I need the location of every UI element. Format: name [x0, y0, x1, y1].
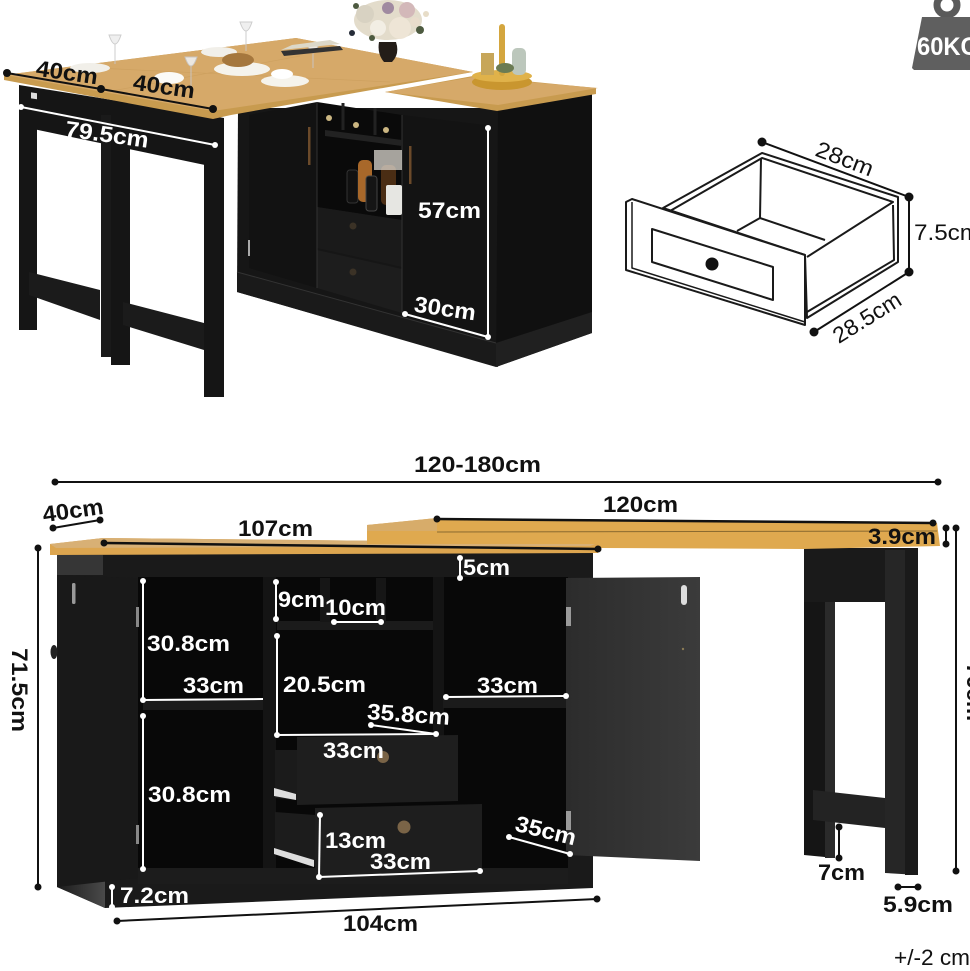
dimension: 13cm lower drawer height: 13cm: [325, 828, 386, 853]
dimension: 71.5cm height: [7, 544, 42, 890]
cabinet countertop: [50, 538, 598, 555]
cabinet carcass: [57, 553, 593, 908]
table apron and legs: [19, 85, 224, 397]
dimension: 28.5cm drawer depth: 28.5cm: [828, 287, 906, 348]
tolerance note: +/-2 cm: [894, 945, 970, 970]
drawer front panel: [626, 199, 805, 325]
icon: gold tray with bottles: [472, 24, 532, 90]
dimension: 35.8cm center depth: 35.8cm: [366, 699, 451, 730]
shelves and dividers: [138, 577, 568, 884]
drawer box: [663, 153, 898, 318]
dimension: 5.9cm leg width: 5.9cm: [883, 892, 953, 917]
dimension: 57cm cabinet height: [418, 125, 491, 340]
dimension: 40cm left tabletop depth: 40cm: [35, 56, 99, 89]
upper drawer open: [274, 735, 458, 805]
dimension: 9cm cubby height: 9cm: [278, 587, 325, 612]
dimension: 28cm drawer width: 28cm: [812, 137, 877, 181]
dimension: 33cm upper drawer width: 33cm: [323, 738, 384, 763]
dimension: 35cm cabinet depth: 35cm: [513, 811, 579, 850]
icon: 60KG load weight: [912, 0, 970, 70]
dimension: 79.5cm leg span: 79.5cm: [64, 116, 150, 153]
panel: drawer line drawing: [626, 137, 970, 348]
dimension: 28.5cm drawer depth: [810, 272, 909, 348]
right door open: [566, 577, 700, 861]
cabinet countertop: [385, 76, 598, 111]
bottles and bowls in cabinet niche: [326, 115, 402, 215]
dimension: 20.5cm center opening height: 20.5cm: [283, 672, 366, 697]
left door details: [50, 583, 139, 844]
dimension: 5.9cm leg width: [883, 884, 953, 917]
dimension: 76cm leg height: [952, 524, 970, 874]
dimension: 10cm cubby width: 10cm: [325, 595, 386, 620]
panel: assembled island perspective view: [3, 0, 598, 397]
dimension: 120cm tabletop: [434, 492, 936, 526]
dimension: 79.5cm leg span: [18, 104, 218, 153]
dimension: 104cm base width: 104cm: [343, 911, 418, 936]
dimension: 7cm leg clearance: [818, 824, 865, 885]
dimension: 30.8cm lower shelf height: [140, 713, 231, 872]
dimension: 33cm lower drawer width: 33cm: [370, 849, 431, 874]
lower drawer open: [274, 804, 482, 877]
dimension: 3.9cm top thickness: 3.9cm: [868, 524, 936, 549]
dimension: 40cm right tabletop depth: [101, 70, 217, 113]
dimension: 7.2cm plinth height: 7.2cm: [120, 883, 189, 908]
dimension: 33cm left shelf width: 33cm: [183, 673, 244, 698]
dimension: 30cm cabinet depth: 30cm: [413, 292, 477, 325]
dimension: 107cm countertop: 107cm: [238, 516, 313, 541]
dimension: 5cm top rail: 5cm: [463, 555, 510, 580]
dimension: 28cm drawer width: [758, 137, 914, 202]
dimension: 71.5cm height: 71.5cm: [7, 648, 32, 732]
dimension: 33cm right shelf width: 33cm: [477, 673, 538, 698]
dimension: 120-180cm overall width: [52, 452, 942, 486]
dimension: 40cm right tabletop depth: 40cm: [132, 70, 196, 103]
panel: open cabinet front view: [7, 452, 970, 936]
dimension: 33cm left shelf width: [143, 673, 263, 700]
door handles and drawer knobs: [248, 127, 412, 276]
icon: flower vase: [349, 0, 429, 62]
dimension: 120-180cm overall width: 120-180cm: [414, 452, 541, 477]
dimension: 30.8cm upper shelf height: 30.8cm: [147, 631, 230, 656]
dimension: 9cm cubby height: [273, 579, 325, 622]
dimension: 20.5cm center opening height: [274, 633, 366, 738]
extended tabletop: [367, 518, 940, 549]
dimension: 33cm right shelf width: [443, 673, 569, 700]
dimension: 40cm left tabletop depth: [3, 56, 105, 93]
dimension: 7cm leg clearance: 7cm: [818, 860, 865, 885]
table leg frame: [804, 548, 918, 875]
dimension: 40cm depth: 40cm: [41, 494, 105, 527]
dimension: 7.5cm drawer height: [904, 197, 970, 276]
dimension: 30cm cabinet depth: [402, 292, 488, 337]
table setting: plates, glasses, book: [70, 22, 343, 87]
dimension: 120cm tabletop: 120cm: [603, 492, 678, 517]
dimension: 30.8cm upper shelf height: [140, 578, 230, 703]
dimension: 13cm lower drawer height: [316, 812, 386, 880]
dimension: 107cm countertop: [100, 516, 602, 552]
dimension: 33cm lower drawer width: [319, 849, 483, 877]
dimension: 30.8cm lower shelf height: 30.8cm: [148, 782, 231, 807]
dimension: 33cm upper drawer width: [277, 731, 439, 763]
extended tabletop leaf: [4, 38, 473, 119]
dimension: 57cm cabinet height: 57cm: [418, 198, 481, 223]
dimension: 104cm base width: [114, 896, 600, 936]
cabinet body: [237, 93, 592, 367]
